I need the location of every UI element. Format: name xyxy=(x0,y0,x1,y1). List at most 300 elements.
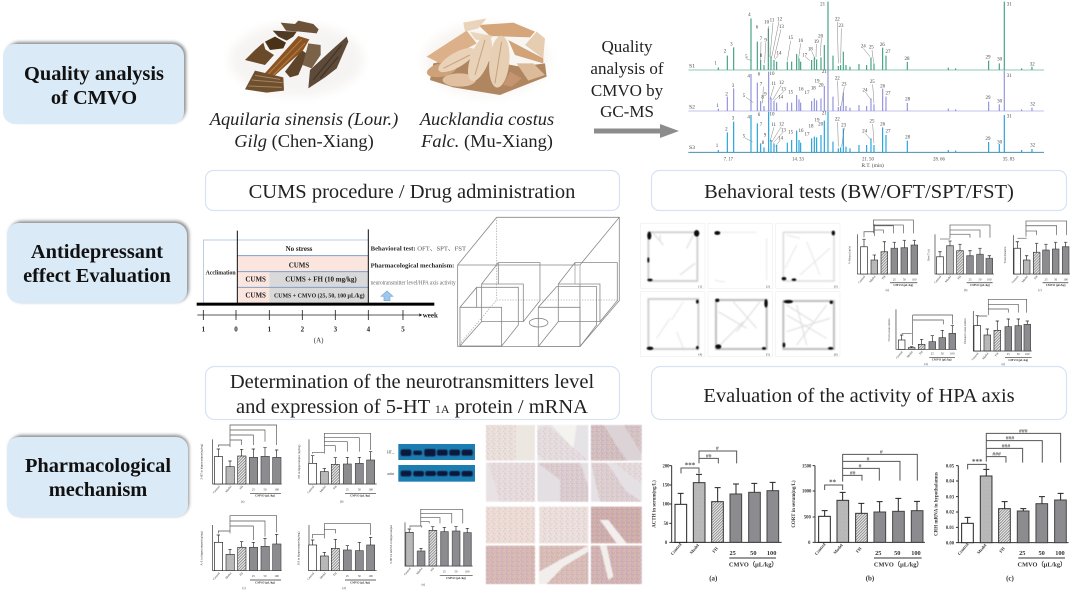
peak numbers S2: 26 xyxy=(880,84,886,89)
sample labels and time axis: 21. 50 xyxy=(862,157,874,162)
chart a: ACTH: 100 xyxy=(663,503,670,508)
chart c: 25 xyxy=(1044,277,1048,281)
track panel 1: (1) xyxy=(698,284,702,288)
chart: GC-MS chromatograms S1 S2 S3 xyxy=(688,2,1044,169)
chart a: ACTH: 150 xyxy=(663,484,670,489)
chart a: sucrose / body weight: 25 xyxy=(893,277,896,281)
peak numbers S3: 14 xyxy=(778,137,784,142)
chart a: ACTH: CMVO（μL/kg） xyxy=(729,560,778,568)
chart b: CORT: # xyxy=(859,464,862,470)
chart e: 5-HT1A mRNA: 5-HT1A mRNA in hippocampus xyxy=(389,524,393,564)
peak numbers S1: 14 xyxy=(776,52,782,57)
chart c: (c) xyxy=(1038,288,1042,292)
peak numbers S2: 14 xyxy=(778,96,784,101)
text: quality analysis by GC-MS xyxy=(590,37,664,121)
peak numbers S1: 15 xyxy=(788,36,794,41)
schedule rows: CUMS + CMVO (25, 50, 100 μL/kg) xyxy=(274,292,365,299)
peak numbers S2: 30 xyxy=(997,99,1003,104)
peak numbers S1: 26 xyxy=(880,43,885,48)
chart a: 5-HT: (a) xyxy=(241,500,244,504)
chart a: ACTH: 50 xyxy=(750,550,756,557)
peak numbers S1: 25 xyxy=(869,46,874,51)
chart c: Total distance xyxy=(1003,246,1007,263)
peak numbers S3: 23 xyxy=(841,123,847,128)
peak numbers S2: 4 xyxy=(747,74,750,79)
peak numbers S3: 21 xyxy=(822,112,827,117)
photo: Aucklandia costus root slices xyxy=(423,18,550,97)
peak numbers S3: 18 xyxy=(808,125,814,130)
chart d: 50 xyxy=(358,574,361,578)
chart c: CRH mRNA: Control xyxy=(957,541,970,556)
upper row 2 xyxy=(486,463,642,502)
chart d: (d) xyxy=(924,362,928,366)
sample labels and time axis: 35. 83 xyxy=(1003,157,1015,162)
side notes: Pharmacological mechanism: xyxy=(371,262,454,269)
chart c: 100 xyxy=(274,574,279,578)
panels: open field tracks xyxy=(640,223,840,357)
peak numbers S3: 7 xyxy=(760,123,763,128)
peak numbers S2: 15 xyxy=(788,90,794,95)
caption: Aquilaria sinensis: Aquilaria sinensis (Lour.) xyxy=(209,109,398,130)
peak numbers S2: 20 xyxy=(818,83,824,88)
chart b: CORT: 25 xyxy=(875,550,881,557)
chart c: Control xyxy=(212,571,221,581)
chart b: CORT: 100 xyxy=(911,550,921,557)
track panel 3 xyxy=(776,223,840,288)
peak numbers S2: 28 xyxy=(905,97,911,102)
chart c: 100 xyxy=(1063,277,1068,281)
peak numbers S3: 11 xyxy=(771,123,777,128)
chart e: Distance zone entries xyxy=(963,317,967,344)
track panel 3: (3) xyxy=(834,284,838,288)
chart b: CORT: Control xyxy=(814,541,827,556)
chart d: FH xyxy=(332,571,338,577)
left label: Antidepressant effect Evaluation: Antidepressant xyxy=(31,241,163,263)
peak numbers S3: 17 xyxy=(804,132,810,137)
peak numbers S2: 11 xyxy=(771,82,777,87)
peak numbers S3: 24 xyxy=(862,130,868,135)
chart e: 5-HT1A mRNA: Model xyxy=(415,567,424,575)
chart c: Model xyxy=(1021,275,1029,283)
week axis: 0 xyxy=(234,326,238,334)
chart e: (e) xyxy=(1002,362,1005,366)
peak numbers S3: 9 xyxy=(764,133,767,138)
peak numbers S3: 26 xyxy=(880,122,886,127)
chart e: 25 xyxy=(1007,352,1010,356)
chart d: Control xyxy=(895,350,904,360)
chart e: 5-HT1A mRNA: 100 xyxy=(465,569,470,573)
week axis: 5 xyxy=(401,326,405,334)
caption: Aucklandia costus: Falc. (Mu-Xiang) xyxy=(420,131,553,152)
peak numbers S2: 27 xyxy=(885,92,891,97)
chart b: NE xyxy=(297,433,377,504)
chart a: ACTH: Model xyxy=(689,542,701,555)
chart a: 5-HT: 100 xyxy=(274,487,279,491)
peak numbers S3: 31 xyxy=(1007,114,1012,119)
chart c: CRH mRNA xyxy=(934,428,1069,582)
bar charts: neurotransmitters xyxy=(200,425,473,590)
peak numbers S2: 6 xyxy=(758,72,761,77)
chart c: A-E in hippocampus(ng/mg) xyxy=(200,531,204,565)
peak numbers S2: 31 xyxy=(1007,74,1012,79)
chart c xyxy=(200,516,282,590)
peak numbers S1: 21 xyxy=(820,2,826,7)
peak numbers S3: 16 xyxy=(798,129,804,134)
caption: Aucklandia costus: Aucklandia costus xyxy=(419,109,554,129)
chart a: sucrose / body weight: 50 xyxy=(903,277,906,281)
peak numbers S2: 12 xyxy=(779,81,784,86)
chart a: ACTH: ## xyxy=(706,454,712,460)
peak numbers S3: 12 xyxy=(779,122,784,127)
chart a: 5-HT: FH xyxy=(239,484,245,490)
peak numbers S2: 19 xyxy=(814,79,820,84)
chart e: 50 xyxy=(1017,352,1020,356)
side notes xyxy=(371,246,466,287)
left label: Antidepressant effect Evaluation: effect Evaluation xyxy=(23,265,172,287)
peak numbers S3: 5 xyxy=(743,134,746,139)
chart d: 50 xyxy=(941,351,944,355)
sample labels and time axis: S3 xyxy=(689,145,695,151)
chart d: 25 xyxy=(346,574,349,578)
chart c: 50 xyxy=(1054,277,1058,281)
heading: Determination of the neurotransmitters xyxy=(206,366,620,420)
chart b: NE: 25 xyxy=(346,487,349,491)
chart b: FH xyxy=(957,274,963,280)
chart c: CRH mRNA: (c) xyxy=(1006,574,1015,582)
chart c: CRH mRNA: 0.05 xyxy=(946,464,955,469)
peak numbers S2: 3 xyxy=(732,84,735,89)
chart a: 5-HT: 25 xyxy=(252,487,255,491)
chart b: CORT: # xyxy=(867,457,870,463)
text: quality analysis by GC-MS: analysis of xyxy=(590,59,664,78)
track panel 2 xyxy=(708,223,772,288)
chart a: sucrose / body weight: (a) xyxy=(886,288,889,292)
chart b: CORT: 0 xyxy=(808,541,811,546)
chart a: ACTH: # xyxy=(716,446,719,452)
chart a: sucrose / body weight xyxy=(847,220,918,292)
week axis: 4 xyxy=(367,326,371,334)
bar charts: behavioral tests xyxy=(847,220,1070,366)
chart a: 5-HT: Model xyxy=(224,485,233,493)
chart b: CORT: 1000 xyxy=(802,490,812,495)
upper row 1 xyxy=(486,425,642,461)
chart c: CRH mRNA: CMVO（μL/kg） xyxy=(1018,560,1066,568)
photo: Aquilaria sinensis wood chips xyxy=(230,21,363,97)
peak numbers S1: 24 xyxy=(861,44,866,49)
chart d: 25 xyxy=(931,351,934,355)
peak numbers S3: 28 xyxy=(905,136,911,141)
peak numbers S1: 17 xyxy=(802,53,808,58)
chart c: Control xyxy=(1010,275,1020,284)
peak numbers S3: 25 xyxy=(869,119,875,124)
track panel 4 xyxy=(640,292,705,357)
peak numbers S2: 17 xyxy=(804,91,810,96)
lower row 2 xyxy=(486,546,642,584)
sample labels and time axis: S2 xyxy=(689,104,695,110)
chart b: Model xyxy=(944,275,952,283)
chart b xyxy=(926,225,994,292)
peak numbers S1: 4 xyxy=(748,13,751,18)
chart e: 5-HT1A mRNA: 25 xyxy=(443,569,446,573)
peak numbers S3: 20 xyxy=(818,122,824,127)
chart b: 100 xyxy=(987,277,992,281)
chart c: CRH mRNA: 0.02 xyxy=(946,511,955,516)
sample labels and time axis: 14. 33 xyxy=(792,157,804,162)
chart e: FH xyxy=(994,351,1000,357)
chart e: 5-HT1A mRNA: 50 xyxy=(454,569,458,573)
peak numbers S1: 32 xyxy=(1030,62,1035,67)
peak numbers S1: 27 xyxy=(885,50,891,55)
trace S2 xyxy=(688,70,1044,111)
chart b: CORT: (b) xyxy=(866,574,875,582)
chart d: (d) xyxy=(342,586,346,590)
chart d: 100 xyxy=(950,351,955,355)
peak numbers S2: 32 xyxy=(1030,103,1036,108)
blot bands xyxy=(401,449,473,476)
peak numbers S3: 32 xyxy=(1030,143,1036,148)
chart c: CRH mRNA: 50 xyxy=(1038,550,1045,557)
chart e: 5-HT1A mRNA: (e) xyxy=(422,583,425,587)
chart b: CORT: 1500 xyxy=(802,464,812,469)
chart e: Control xyxy=(970,352,980,361)
chart e: 5-HT1A mRNA: Control xyxy=(403,567,412,576)
chart b: NE: 100 xyxy=(368,487,373,491)
chart c: Model xyxy=(224,571,233,580)
peak numbers S3 xyxy=(716,112,1036,149)
chart c: CMVO (μL/kg) xyxy=(255,580,275,584)
left label: Quality analysis of CMVO xyxy=(3,42,186,124)
peak numbers S3: 19 xyxy=(814,119,820,124)
peak numbers S1: 8 xyxy=(760,54,763,59)
chart d: N-Cen zone entries xyxy=(887,318,891,342)
chart b: NE: 50 xyxy=(358,487,361,491)
week axis: 3 xyxy=(334,326,338,334)
diagram: open field box xyxy=(458,217,619,347)
chart e: Model xyxy=(981,352,990,360)
chart e: 5-HT1A mRNA: CMVO (μL/kg) xyxy=(446,576,466,580)
peak numbers S2: 7 xyxy=(760,82,763,87)
chart c: CRH mRNA: 0.00 xyxy=(946,541,955,546)
peak numbers S1: 2 xyxy=(724,49,727,54)
text: quality analysis by GC-MS: Quality xyxy=(602,37,653,56)
peak numbers S1: 9 xyxy=(764,38,767,43)
chart b: NE: Control xyxy=(306,485,315,494)
track panel 5 xyxy=(708,292,772,357)
chart a: sucrose / body weight: 100 xyxy=(912,277,917,281)
peak numbers S3: 30 xyxy=(997,140,1003,145)
peak numbers S2: 25 xyxy=(870,80,875,85)
chart c: CRH mRNA: CRH mRNA in hypothalamus xyxy=(934,472,939,536)
chart c: CRH mRNA: 100 xyxy=(1055,550,1065,557)
chart b: CORT: Model xyxy=(832,542,844,555)
sample labels and time axis xyxy=(689,64,1015,169)
peak numbers S1: 22 xyxy=(835,17,840,22)
chart a: ACTH: 0 xyxy=(665,541,668,546)
chart e: 100 xyxy=(1025,352,1030,356)
heading: Determination of the neurotransmitters: and expression of 5-HT 1A protein / mRNA xyxy=(236,396,588,418)
chart b: CORT: ** xyxy=(829,479,837,487)
peak numbers S2: 10 xyxy=(769,72,775,77)
peak numbers S1: 6 xyxy=(756,25,759,30)
side notes: neurotransmitter level/HPA axis activity xyxy=(371,280,456,287)
heading: Evaluation of HPA axis xyxy=(652,366,1066,420)
heading: Behavioral tests xyxy=(652,170,1066,210)
chart a: ACTH: Control xyxy=(670,541,683,556)
peak numbers S3: 10 xyxy=(769,113,775,118)
schedule rows: Acclimation xyxy=(206,269,236,276)
heading: CUMS procedure xyxy=(206,170,620,210)
peak numbers S1: 20 xyxy=(818,34,824,39)
track panel 1 xyxy=(640,223,705,288)
peak numbers S3: 2 xyxy=(725,128,728,133)
chart b: NE: (b) xyxy=(340,500,343,504)
chart e xyxy=(963,299,1032,366)
peak numbers S1: 11 xyxy=(770,18,775,23)
peak numbers S1: 10 xyxy=(764,21,770,26)
peak numbers S2 xyxy=(716,70,1036,109)
peak numbers S2: 1 xyxy=(716,104,719,109)
left label: Quality analysis of CMVO: Quality analysis xyxy=(24,63,164,85)
peak numbers S2: 18 xyxy=(811,87,816,92)
chart b: CORT: 50 xyxy=(894,550,900,557)
side notes: Behavioral test: OFT、SPT、FST xyxy=(371,246,466,253)
peak numbers S2: 8 xyxy=(761,96,764,101)
peak numbers S1: 23 xyxy=(838,24,844,29)
chart a: sucrose / body weight: Model xyxy=(868,275,877,283)
trace S1 xyxy=(688,2,1044,70)
chart a: sucrose / body weight: Control xyxy=(857,275,866,284)
chart b: 25 xyxy=(968,277,972,281)
peak numbers S3: 1 xyxy=(716,144,719,149)
chart a: ACTH: ACTH in serum(ng/L) xyxy=(652,480,657,528)
chart b: CORT: # xyxy=(880,449,883,455)
chart c: CRH mRNA: FH xyxy=(998,545,1006,554)
chart c: (c) xyxy=(242,586,246,590)
peak numbers S3: 27 xyxy=(885,130,891,135)
week axis: 2 xyxy=(301,326,305,334)
peak numbers S1 xyxy=(714,2,1035,67)
peak numbers S3: 13 xyxy=(781,128,786,133)
western blots: actin xyxy=(387,472,394,476)
peak numbers S2: 24 xyxy=(862,88,868,93)
left label: Quality analysis of CMVO: of CMVO xyxy=(51,87,137,109)
chart a: 5-HT: Control xyxy=(212,485,221,494)
chart b: CORT: FH xyxy=(855,545,863,554)
heading: Behavioral tests: Behavioral tests (BW/OFT/SPT/FST) xyxy=(704,181,1014,203)
chart c: CMVO (μL/kg) xyxy=(1046,283,1066,287)
peak numbers S1: 16 xyxy=(798,39,804,44)
sample labels and time axis: 7. 17 xyxy=(724,157,734,162)
chart d: DA in hippocampus(ng/mg) xyxy=(296,532,300,565)
chart d: Control xyxy=(306,571,315,581)
heading: CUMS procedure: CUMS procedure / Drug administration xyxy=(249,181,575,203)
micrographs: IHC xyxy=(486,425,642,584)
peak numbers S1: 7 xyxy=(760,37,763,42)
chart c: CRH mRNA: Model xyxy=(976,542,988,555)
chart d: CMVO (μL/kg) xyxy=(932,357,952,361)
left label: Antidepressant effect Evaluation xyxy=(7,221,189,303)
chart b: NE: FH xyxy=(332,484,338,490)
peak numbers S2: 23 xyxy=(841,82,847,87)
week axis: week xyxy=(423,312,438,320)
chart a: sucrose / body weight: V-Mean (cm/s) xyxy=(847,246,851,264)
chart e: CMVO (μL/kg) xyxy=(1008,358,1028,362)
peak numbers S1: 12 xyxy=(777,17,783,22)
peak numbers S1: 3 xyxy=(730,42,733,47)
peak numbers S2: 13 xyxy=(781,88,786,93)
chart a: ACTH: 200 xyxy=(663,464,670,469)
chart b: CMVO (μL/kg) xyxy=(970,283,990,287)
peak numbers S1: 31 xyxy=(1007,2,1012,7)
schedule rows xyxy=(203,229,368,304)
peak numbers S1: 1 xyxy=(714,62,717,67)
chart c: CRH mRNA: 0.04 xyxy=(946,480,955,485)
icon: up arrow xyxy=(381,291,393,301)
chart a: ACTH: 25 xyxy=(729,550,736,557)
chart a: 5-HT: 50 xyxy=(264,487,267,491)
track panel 5: (5) xyxy=(766,353,770,357)
chart a: 5-HT xyxy=(200,425,282,504)
chart c: CRH mRNA: 0.03 xyxy=(946,495,955,500)
chart d: FH xyxy=(918,349,924,356)
chart a: ACTH: (a) xyxy=(709,574,718,582)
peak numbers S1: 5 xyxy=(745,55,748,60)
chart b: NE: NE in hippocampus (ng/mg) xyxy=(297,445,301,479)
sample labels and time axis: 28. 66 xyxy=(933,157,945,162)
text: quality analysis by GC-MS: CMVO by xyxy=(591,81,664,100)
heading: Determination of the neurotransmitters: Determination of the neurotransmitters level xyxy=(230,371,594,393)
chart d: Model xyxy=(319,571,327,580)
peak numbers S3: 4 xyxy=(747,116,750,121)
chart d xyxy=(296,524,377,590)
week axis: 1 xyxy=(268,326,272,334)
chart d: 100 xyxy=(368,574,373,578)
chart c: CRH mRNA: ### xyxy=(1006,436,1014,442)
peak numbers S1: 29 xyxy=(985,56,991,61)
peak numbers S2: 5 xyxy=(743,94,746,99)
caption: Aquilaria sinensis xyxy=(209,109,398,152)
peak numbers S3: 29 xyxy=(985,137,991,142)
peak numbers S2: 29 xyxy=(985,96,991,101)
peak numbers S3: 15 xyxy=(788,131,794,136)
chart b: NE: Model xyxy=(319,485,327,493)
heading: Evaluation of HPA axis: Evaluation of the activity of HPA axis xyxy=(703,385,1015,407)
track panel 6 xyxy=(776,292,840,357)
schedule rows: CUMS + FH (10 mg/kg) xyxy=(285,275,357,283)
schedule rows: CUMS xyxy=(245,291,266,299)
chart c: 50 xyxy=(264,574,267,578)
western blots xyxy=(387,444,475,482)
chart b: CORT: CMVO（μL/kg） xyxy=(874,560,923,568)
lower row 1 xyxy=(486,507,642,543)
chart a: ACTH: *** xyxy=(685,461,696,469)
chart a: ACTH: 50 xyxy=(664,522,669,527)
chart d: Model xyxy=(906,350,914,359)
chart c: CRH mRNA: 0.01 xyxy=(946,526,955,531)
chart e: 5-HT1A mRNA: FH xyxy=(430,566,436,572)
peak numbers S3: 6 xyxy=(758,113,761,118)
peak numbers S1: 28 xyxy=(904,57,910,62)
chart c: 25 xyxy=(252,574,255,578)
chart a: sucrose / body weight: CMVO (μL/kg) xyxy=(893,283,913,287)
trace S3 xyxy=(688,112,1044,152)
sample labels and time axis: R.T. (min) xyxy=(862,162,884,169)
peak numbers S1: 19 xyxy=(814,40,819,45)
chart e: 5-HT1A mRNA xyxy=(389,509,473,587)
peak numbers S2: 2 xyxy=(725,93,728,98)
chart a: 5-HT: 5-HT in hippocampus(ng/mg) xyxy=(200,444,204,480)
chart c xyxy=(1003,221,1070,292)
